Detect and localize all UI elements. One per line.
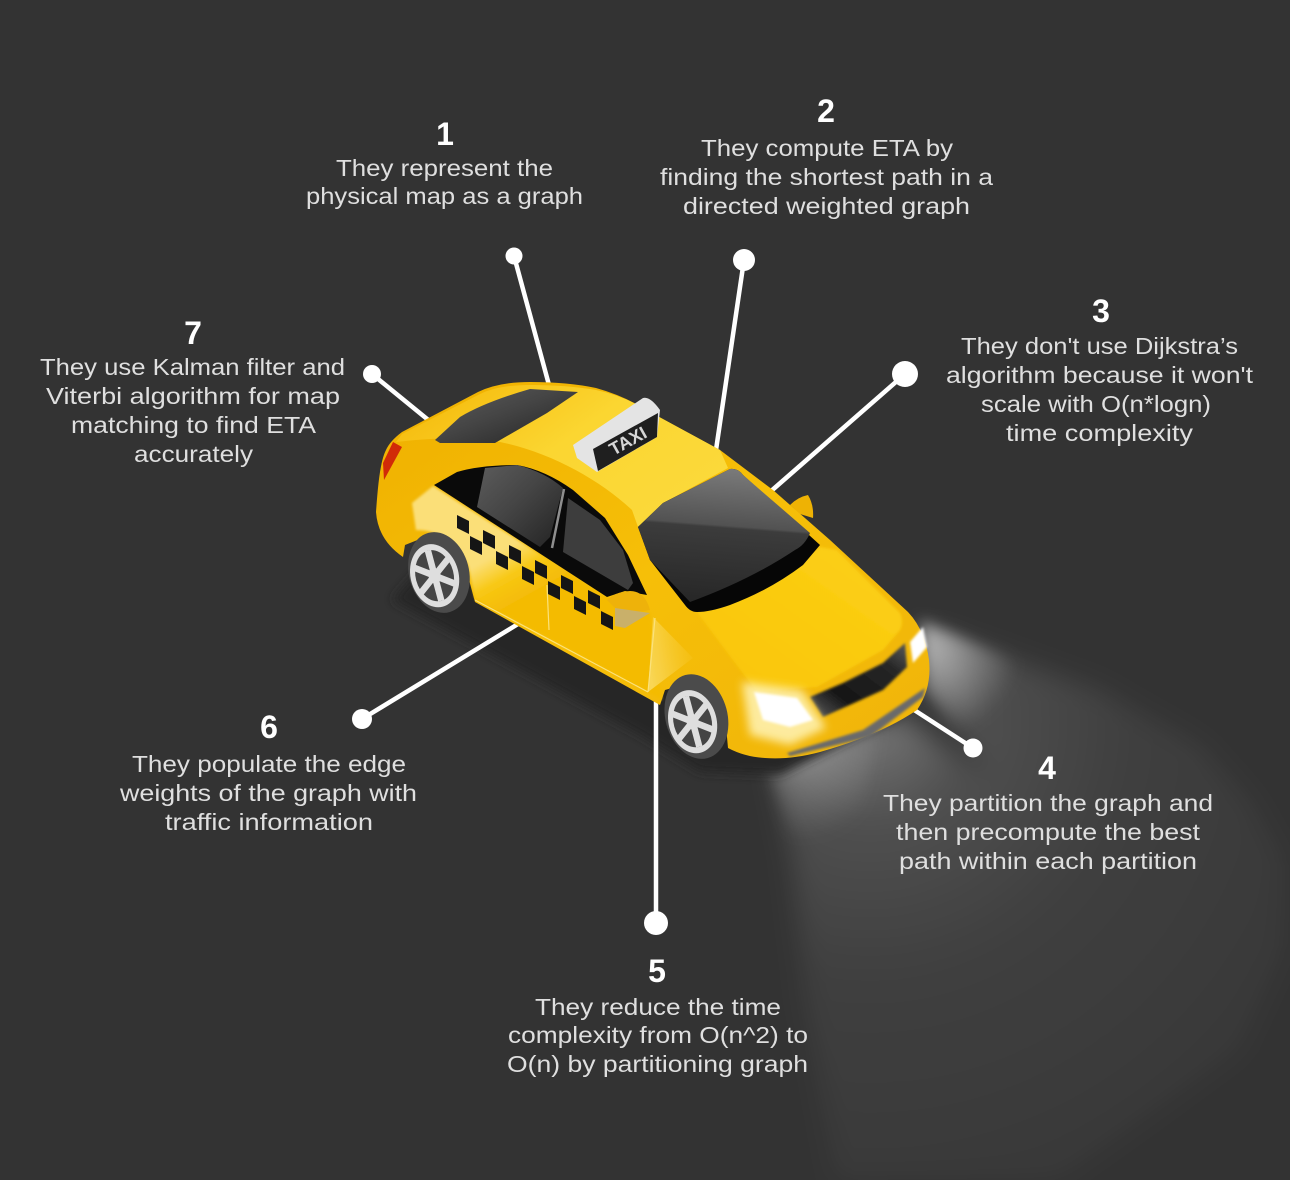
callout 7 xyxy=(40,315,345,467)
callout 5: complexity from O(n^2) to xyxy=(508,1022,808,1048)
callout 5: O(n) by partitioning graph xyxy=(507,1051,808,1077)
callout 7: accurately xyxy=(134,441,254,467)
taxi car xyxy=(376,382,930,766)
callout 3: algorithm because it won't xyxy=(946,362,1254,388)
connector line 7 xyxy=(363,365,432,423)
car side panel xyxy=(412,486,662,700)
callout 6: 6 xyxy=(260,709,278,745)
front door glass xyxy=(563,498,633,590)
car far mirror xyxy=(790,495,813,518)
callout 2: directed weighted graph xyxy=(683,193,970,219)
rear wheel xyxy=(399,525,479,620)
callout 4: 4 xyxy=(1038,750,1056,786)
callout 2 xyxy=(660,93,993,219)
checkered stripe xyxy=(457,515,613,630)
callout 1 xyxy=(306,116,583,209)
taxi roof sign xyxy=(573,398,660,472)
callout 5: 5 xyxy=(648,953,666,989)
car hood xyxy=(697,547,902,692)
car roof xyxy=(396,385,728,527)
connector line 1 xyxy=(506,248,549,385)
tail light xyxy=(383,442,402,480)
connector line 6 xyxy=(352,624,518,729)
car side window xyxy=(434,465,647,597)
rear door glass xyxy=(477,465,563,547)
callout 3 xyxy=(946,293,1254,446)
left headlight xyxy=(742,682,826,745)
callout 3: scale with O(n*logn) xyxy=(981,391,1211,417)
callout 4: then precompute the best xyxy=(896,819,1201,845)
callout 6: They populate the edge xyxy=(132,751,406,777)
callout 2: 2 xyxy=(817,93,835,129)
callout 1: physical map as a graph xyxy=(306,183,583,209)
car fender highlight xyxy=(648,617,693,692)
callout 3: 3 xyxy=(1092,293,1110,329)
car rear window xyxy=(435,389,578,443)
connector line 2 xyxy=(716,249,755,450)
car windshield xyxy=(638,469,820,612)
callout 2: finding the shortest path in a xyxy=(660,164,993,190)
callout 5: They reduce the time xyxy=(535,994,781,1020)
car near mirror xyxy=(607,591,650,628)
ground shadow xyxy=(392,545,905,775)
callout 2: They compute ETA by xyxy=(701,135,954,161)
connector line 3 xyxy=(770,361,918,492)
connector line 5 xyxy=(644,700,668,935)
connector line 4 xyxy=(908,706,982,758)
callout 6: traffic information xyxy=(165,809,373,835)
callout 4 xyxy=(883,750,1213,874)
callout 7: Viterbi algorithm for map xyxy=(46,383,340,409)
car body xyxy=(376,382,930,758)
callout 6 xyxy=(119,709,417,835)
callout 7: They use Kalman filter and xyxy=(40,354,345,380)
bumper slot xyxy=(787,688,925,756)
window pillar xyxy=(552,489,564,548)
callout 7: matching to find ETA xyxy=(71,412,317,438)
car door lines xyxy=(475,585,655,692)
callout 3: They don't use Dijkstra’s xyxy=(961,333,1238,359)
front grille xyxy=(810,643,907,717)
callout 4: They partition the graph and xyxy=(883,790,1213,816)
front wheel xyxy=(655,667,737,766)
callout 1: They represent the xyxy=(336,155,553,181)
callout 3: time complexity xyxy=(1006,420,1194,446)
right headlight xyxy=(910,627,927,663)
callout 5 xyxy=(507,953,808,1077)
taxi sign text: TAXI xyxy=(606,423,650,459)
callout 4: path within each partition xyxy=(899,848,1197,874)
callout 7: 7 xyxy=(184,315,202,351)
callout 6: weights of the graph with xyxy=(119,780,417,806)
callout 1: 1 xyxy=(436,116,454,152)
headlight beam xyxy=(760,620,1285,1180)
